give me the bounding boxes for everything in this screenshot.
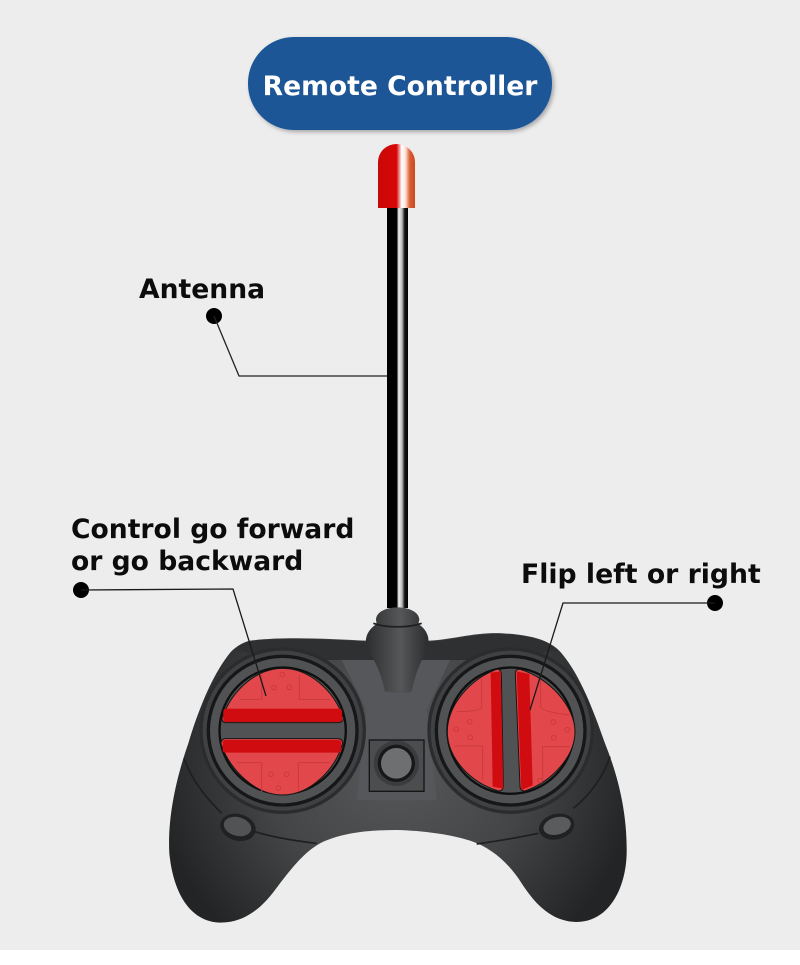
right dial xyxy=(427,647,594,814)
title badge xyxy=(248,37,552,130)
left dial upper button xyxy=(222,668,343,723)
callout line: forward/backward xyxy=(73,582,266,696)
lower grip seam right xyxy=(477,757,610,844)
right dial left button xyxy=(447,669,503,791)
label: Flip left or right: Flip left or right xyxy=(521,559,761,590)
left screw xyxy=(217,810,259,845)
label: Control go forward or go backward: or go backward xyxy=(71,546,303,577)
label: Control go forward or go backward: Control go forward xyxy=(71,514,354,545)
callout line: flip xyxy=(530,595,723,710)
left dial lower button xyxy=(221,739,343,795)
antenna xyxy=(378,144,415,608)
antenna red cap xyxy=(378,144,415,208)
lower grip seam left xyxy=(184,758,317,843)
remote controller body xyxy=(169,607,627,923)
center joystick button xyxy=(369,740,424,791)
button texture upper xyxy=(237,672,330,792)
top band shade xyxy=(235,634,557,660)
button texture side xyxy=(454,678,570,783)
grip shell xyxy=(169,633,627,923)
antenna rod xyxy=(387,208,408,608)
callout line: Antenna xyxy=(206,308,387,376)
title badge: Remote Controller xyxy=(263,71,538,102)
right dial right button xyxy=(515,669,575,791)
right screw xyxy=(536,810,577,844)
left dial xyxy=(199,647,366,814)
center plate xyxy=(342,660,450,800)
label: Antenna: Antenna xyxy=(139,274,265,305)
neck socket xyxy=(366,607,428,692)
